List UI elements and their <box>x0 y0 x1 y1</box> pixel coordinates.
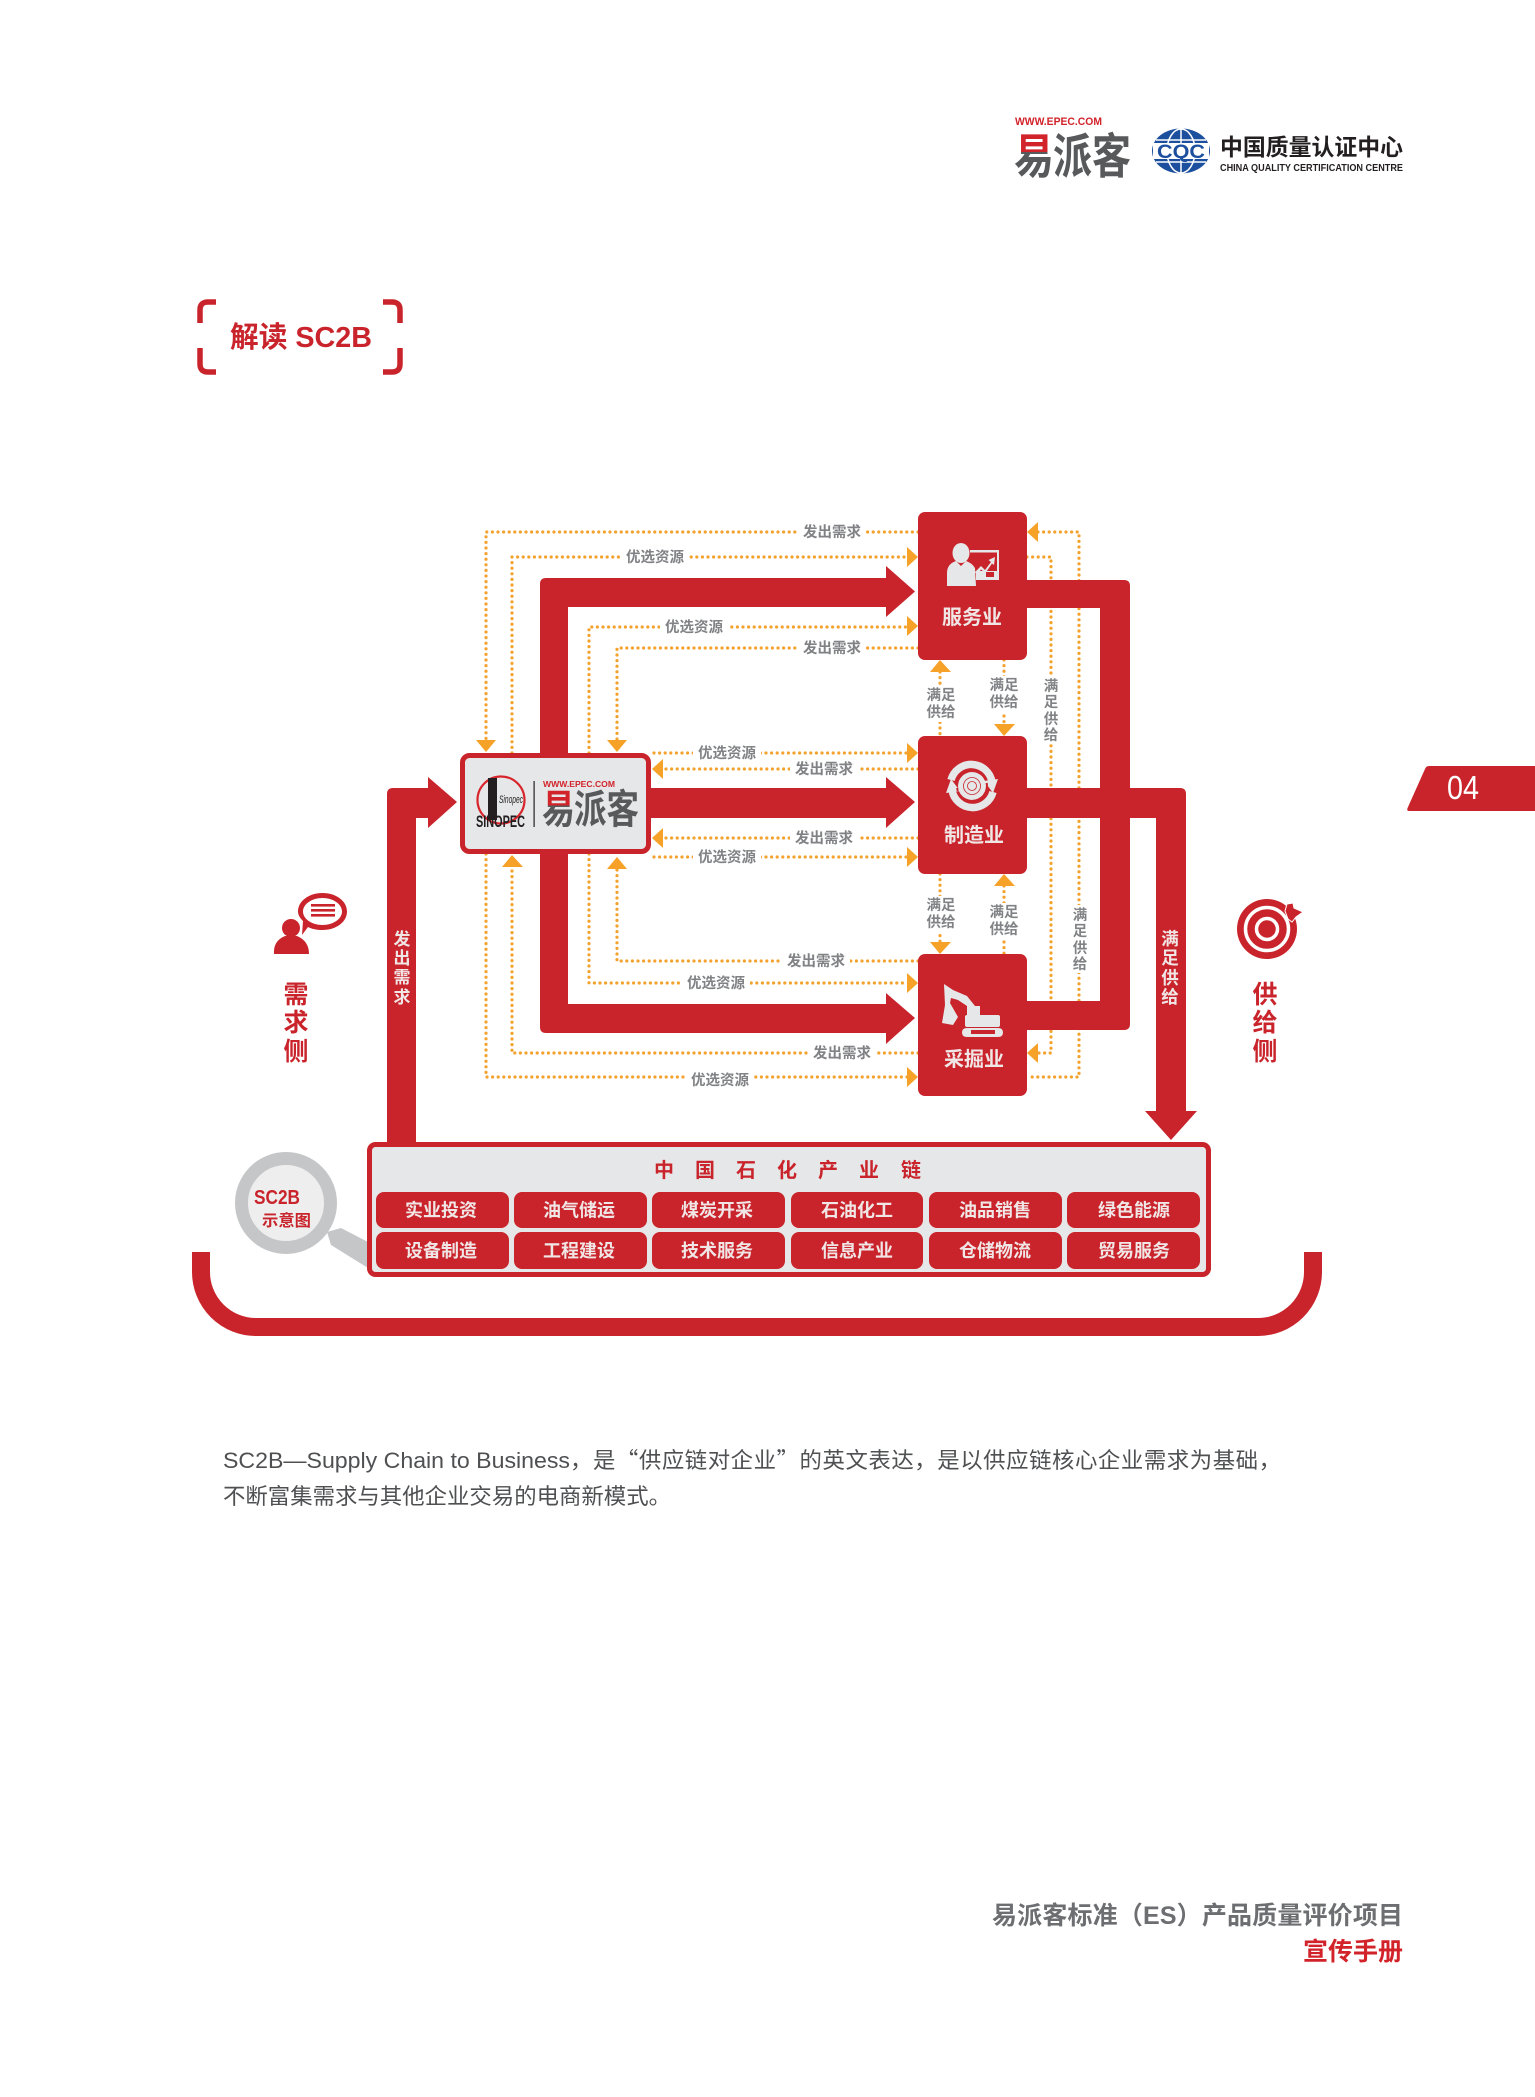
thick arrow: platform to manufacturing <box>649 777 915 828</box>
icon: demand side person with speech bubble <box>274 893 347 954</box>
cells: industry sectors: 工程建设 <box>543 1241 615 1261</box>
icon: excavator <box>942 984 1003 1037</box>
heading: industry chain: 业 <box>859 1159 879 1182</box>
cells: industry sectors: 油气储运 <box>543 1200 615 1220</box>
panel: manufacturing industry <box>918 736 1027 874</box>
arrow: right inner supply line: 满 <box>1044 677 1058 695</box>
arrow: middle resource line upper <box>654 743 918 763</box>
thick arrow: demand up with label: 需 <box>394 968 410 987</box>
panel: mining industry: 采掘业 <box>944 1048 1004 1071</box>
logo: CQC: CHINA QUALITY CERTIFICATION CENTRE <box>1220 162 1403 174</box>
arrow: supply service to manufacturing right: 满足 <box>990 676 1019 694</box>
heading: industry chain: 国 <box>695 1160 715 1182</box>
arrow: middle demand line lower <box>652 828 918 848</box>
arrow: right outer supply line: 满 <box>1073 906 1087 924</box>
arrow: supply service to manufacturing right: 供给 <box>990 693 1019 711</box>
thick arrow: service and mining supply <box>1025 580 1130 1030</box>
label: supply side: 供 <box>1252 981 1278 1009</box>
arrow: top outer resource line: 优选资源 <box>626 549 684 566</box>
arrow: supply mining to manufacturing right: 供给 <box>990 920 1019 938</box>
arrow: bottom outer demand line: 发出需求 <box>813 1044 871 1062</box>
arrow: top inner demand line: 发出需求 <box>803 639 861 657</box>
arrow: right inner supply line: 供 <box>1044 711 1059 728</box>
label: demand side: 侧 <box>283 1038 309 1066</box>
icon: presenter with chart <box>947 543 999 586</box>
arrow: right inner supply line <box>1027 557 1060 1063</box>
arrow: supply manufacturing to service left <box>925 660 957 736</box>
panel: platform logos: WWW.EPEC.COM <box>543 780 615 789</box>
logo: CQC: 中国质量认证中心 <box>1220 134 1403 160</box>
thick arrow: supply down with label: 足 <box>1161 948 1179 968</box>
logo: EPEC: 易 <box>1014 131 1054 184</box>
arrow: right inner supply line: 给 <box>1044 726 1059 744</box>
arrow: right outer supply line: 给 <box>1073 955 1088 973</box>
thick arrow: supply down with label: 给 <box>1161 987 1179 1007</box>
arrow: top inner resource line <box>589 616 918 753</box>
heading: industry chain: 产 <box>818 1159 838 1182</box>
cells: industry sectors: 绿色能源 <box>1098 1200 1170 1220</box>
text block: SC2B description <box>223 1443 1281 1509</box>
cells: industry sectors <box>376 1192 1200 1269</box>
logo: CQC: CQC <box>1157 142 1205 163</box>
arrow: middle resource line upper: 优选资源 <box>698 745 756 762</box>
arrow: right inner supply line: 足 <box>1044 695 1059 711</box>
arrow: supply manufacturing to service left: 供给 <box>926 703 956 721</box>
arrow: right outer supply line: 供 <box>1073 940 1088 957</box>
icon: magnifier with SC2B label: SC2B <box>254 1187 300 1209</box>
arrow: top inner demand line <box>607 638 918 752</box>
arrow: top outer resource line <box>512 547 918 753</box>
arrow: middle demand line upper: 发出需求 <box>795 760 853 778</box>
logo: CQC <box>1152 128 1403 174</box>
icon: supply side target <box>1237 899 1303 959</box>
arrow: bottom inner demand line: 发出需求 <box>787 952 845 970</box>
arrow: top inner resource line: 优选资源 <box>665 619 723 636</box>
label: supply side: 给 <box>1252 1009 1278 1037</box>
cells: industry sectors: 技术服务 <box>681 1241 753 1261</box>
heading: industry chain: 中 <box>654 1159 674 1182</box>
cells: industry sectors: 实业投资 <box>405 1200 477 1220</box>
arrow: bottom outer resource line <box>486 854 918 1089</box>
panel: platform logos <box>462 756 648 852</box>
icon: magnifier with SC2B label: 示意图 <box>262 1211 311 1230</box>
arrow: supply service to manufacturing right <box>988 660 1020 736</box>
label: supply side: 侧 <box>1252 1038 1278 1066</box>
cells: industry sectors: 贸易服务 <box>1098 1241 1170 1261</box>
label: demand side: 求 <box>283 1009 309 1037</box>
arrow: supply mining to manufacturing right: 满足 <box>990 903 1019 921</box>
arrow: top outer demand line <box>476 522 918 752</box>
arrow: middle demand line upper <box>652 759 918 779</box>
footer: project name: 宣传手册 <box>1303 1938 1403 1966</box>
text block: SC2B description: ，是“供应链对企业”的英文表达，是以供应链核心企业需求为基础， <box>570 1443 1281 1475</box>
arrow: right outer supply line: 足 <box>1073 924 1088 940</box>
cells: industry sectors: 石油化工 <box>821 1200 893 1220</box>
arrow: middle demand line lower: 发出需求 <box>795 829 853 847</box>
logo: EPEC: 派客 <box>1053 131 1131 184</box>
heading: industry chain: 链 <box>901 1159 921 1182</box>
arrow: supply mining to manufacturing right <box>988 874 1020 954</box>
arrow: middle resource line lower: 优选资源 <box>698 849 756 866</box>
arrow: bottom inner demand line <box>607 857 918 971</box>
arrow: right outer supply line <box>1027 522 1089 1077</box>
arrow: top outer demand line: 发出需求 <box>803 523 861 541</box>
label: demand side: 需 <box>283 981 309 1009</box>
text block: SC2B description: SC2B—Supply Chain to Business <box>223 1448 570 1473</box>
logo: EPEC: WWW.EPEC.COM <box>1015 116 1102 128</box>
icon: gear with cycle arrows <box>946 764 998 808</box>
panel: platform logos: 易 <box>542 787 575 832</box>
heading: industry chain <box>654 1159 921 1182</box>
thick arrow: platform to service <box>540 566 915 755</box>
heading: 解读 SC2B <box>200 302 400 372</box>
footer: project name <box>992 1901 1403 1966</box>
panel: manufacturing industry: 制造业 <box>944 824 1004 847</box>
panel: platform logos: Sinopec <box>499 794 523 806</box>
bottom bracket <box>201 1252 1313 1327</box>
arrow: middle resource line lower <box>654 847 918 867</box>
thick arrow: demand up with label: 出 <box>394 949 410 968</box>
cells: industry sectors: 煤炭开采 <box>681 1200 753 1220</box>
footer: project name: 易派客标准（ES）产品质量评价项目 <box>992 1901 1403 1930</box>
thick arrow: demand up with label: 求 <box>394 988 410 1007</box>
panel: platform logos: SINOPEC <box>476 812 525 831</box>
panel: platform logos: 派客 <box>574 787 639 832</box>
thick arrow: demand up with label: 发 <box>394 929 410 949</box>
arrow: bottom inner resource line: 优选资源 <box>687 975 745 992</box>
arrow: bottom outer demand line <box>502 855 918 1063</box>
panel: service industry <box>918 512 1027 660</box>
heading: industry chain: 化 <box>777 1159 797 1182</box>
thick arrow: demand up with label <box>387 777 457 1146</box>
text block: SC2B description: 不断富集需求与其他企业交易的电商新模式。 <box>223 1484 671 1509</box>
page number tab: 04 <box>1447 769 1479 806</box>
thick arrow: supply down with label: 满 <box>1161 929 1179 949</box>
cells: industry sectors: 设备制造 <box>405 1241 477 1261</box>
panel: Sinopec industry chain <box>370 1144 1208 1274</box>
thick arrow: supply down with label <box>1025 788 1197 1140</box>
cells: industry sectors: 信息产业 <box>821 1240 893 1261</box>
arrow: bottom inner resource line <box>589 854 918 993</box>
panel: mining industry <box>918 954 1027 1096</box>
panel: service industry: 服务业 <box>942 606 1002 629</box>
heading: industry chain: 石 <box>736 1160 756 1182</box>
thick arrow: supply down with label: 供 <box>1161 968 1179 988</box>
arrow: supply manufacturing to mining left: 供给 <box>926 913 956 931</box>
heading: 解读 SC2B: 解读 SC2B <box>230 321 372 354</box>
cells: industry sectors: 油品销售 <box>959 1200 1031 1220</box>
thick arrow: platform to mining <box>540 850 915 1044</box>
arrow: supply manufacturing to mining left <box>925 874 957 954</box>
arrow: bottom outer resource line: 优选资源 <box>691 1072 749 1089</box>
arrow: supply manufacturing to mining left: 满足 <box>926 896 956 914</box>
page number tab <box>1407 766 1535 811</box>
arrow: supply manufacturing to service left: 满足 <box>926 686 956 704</box>
cells: industry sectors: 仓储物流 <box>959 1241 1031 1261</box>
icon: magnifier with SC2B label <box>242 1158 368 1268</box>
logo: EPEC <box>1014 116 1131 184</box>
